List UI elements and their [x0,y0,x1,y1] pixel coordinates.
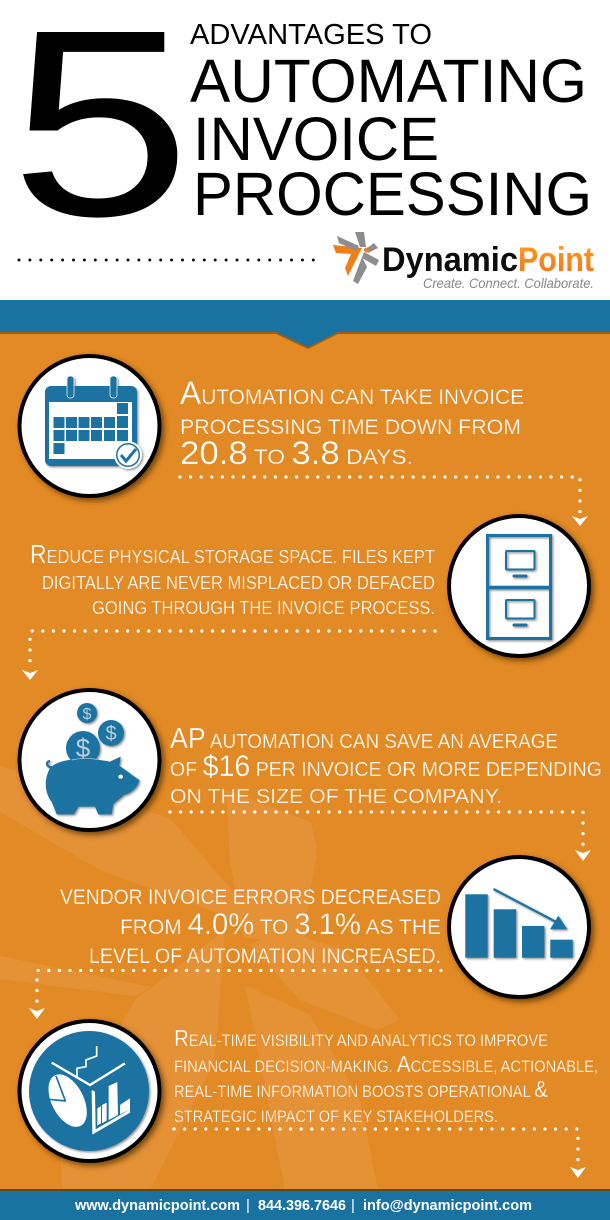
arrow: dotted path to item 3 [22,631,435,680]
text: processing time: AUTOMATION CAN TAKE INVOICE [180,375,524,411]
text: fewer errors: LEVEL OF AUTOMATION INCREASED. [89,944,441,968]
advantage 5: real-time visibility [20,1021,598,1178]
footer contact details: info@dynamicpoint.com [363,1197,532,1214]
logo: DynamicPoint: Dynamic [382,241,518,279]
title: INVOICE [193,105,439,173]
orange background panel [0,330,610,1192]
arrow: dotted path to item 5 [29,970,441,1019]
text: fewer errors [60,885,441,968]
footer contact details: www.dynamicpoint.com [74,1197,240,1214]
icon: piggy bank with coins: $ [83,706,92,723]
text: processing time [180,375,524,471]
icon: calendar [20,356,160,496]
text: real-time visibility: REAL-TIME VISIBILITY AND ANALYTICS TO IMPROVE [174,1025,548,1051]
advantage 2: storage space [22,516,589,680]
text: cost savings [170,723,602,808]
arrow: dotted path to footer [174,1129,586,1178]
footer contact details: 844.396.7646 [258,1197,346,1214]
text: storage space: DIGITALLY ARE NEVER MISPLACED OR DEFACED [42,572,435,593]
text: real-time visibility [174,1025,598,1126]
logo: DynamicPoint [333,232,594,291]
text: real-time visibility: FINANCIAL DECISION-MAKING. ACCESSIBLE, ACTIONABLE, [174,1051,598,1077]
text: cost savings: ON THE SIZE OF THE COMPANY. [170,785,502,808]
arrow: dotted path to item 2 [180,477,588,526]
title: ADVANTAGES TO [190,19,432,51]
white header background [0,0,610,300]
footer contact details [74,1197,532,1214]
top blue band with pointer [0,300,610,349]
footer contact details: | [246,1197,250,1214]
advantage 1: processing time [20,356,588,526]
text: processing time: 20.8 TO 3.8 DAYS. [180,435,413,471]
text: cost savings: AP AUTOMATION CAN SAVE AN AVERAGE [170,723,558,755]
text: processing time: PROCESSING TIME DOWN FROM [180,416,521,439]
faint logo watermark [0,766,400,1190]
text: fewer errors: VENDOR INVOICE ERRORS DECREASED [60,885,441,909]
arrow: dotted path to item 4 [170,812,591,861]
text: fewer errors: FROM 4.0% TO 3.1% AS THE [120,908,441,941]
logo: DynamicPoint: Create. Connect. Collaborate. [423,275,594,291]
header dotted line [19,258,314,262]
advantage 3: cost savings [20,690,602,861]
icon: declining bar chart [449,857,589,997]
icon: piggy bank with coins: $ [105,723,117,745]
text: storage space [30,541,435,618]
title [190,19,592,228]
icon: piggy bank with coins [20,690,160,830]
icon: piggy bank with coins: $ [76,733,91,763]
text: storage space: REDUCE PHYSICAL STORAGE SPACE. FILES KEPT [30,541,435,569]
title: AUTOMATING [190,47,587,115]
text: cost savings: OF $16 PER INVOICE OR MORE DEPENDING [170,750,602,783]
text: real-time visibility: REAL-TIME INFORMATION BOOSTS OPERATIONAL & [174,1076,549,1102]
footer contact details: | [351,1197,355,1214]
text: real-time visibility: STRATEGIC IMPACT OF KEY STAKEHOLDERS. [174,1108,498,1126]
text: storage space: GOING THROUGH THE INVOICE PROCESS. [92,597,435,618]
icon: filing cabinet [449,516,589,656]
icon: analytics [20,1021,160,1161]
title: PROCESSING [193,160,592,228]
logo: DynamicPoint: Point [518,241,594,279]
footer band [0,1189,610,1220]
advantage 4: fewer errors [29,857,589,1019]
